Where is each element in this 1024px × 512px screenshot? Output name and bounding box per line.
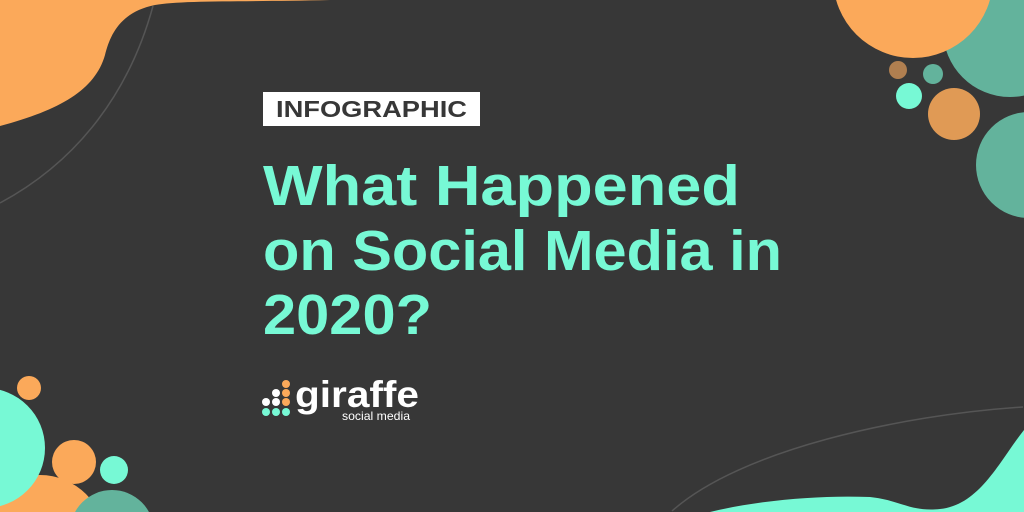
label: INFOGRAPHIC <box>263 92 480 126</box>
title: on Social Media in <box>263 219 782 283</box>
title: What Happened <box>263 154 740 218</box>
logo: giraffe social media: social media <box>342 409 410 423</box>
decorative blob: bottom-right cyan <box>710 430 1024 512</box>
decorative blob: top-left orange <box>0 0 330 126</box>
icon: dot grid <box>262 380 290 416</box>
decorative circles: bottom-left <box>0 376 154 512</box>
title <box>263 154 782 347</box>
title: 2020? <box>263 283 432 347</box>
label: INFOGRAPHIC: INFOGRAPHIC <box>276 96 467 122</box>
logo: giraffe social media <box>262 374 419 423</box>
decorative circles: top-right <box>833 0 1024 218</box>
logo: giraffe social media: giraffe <box>295 374 419 415</box>
